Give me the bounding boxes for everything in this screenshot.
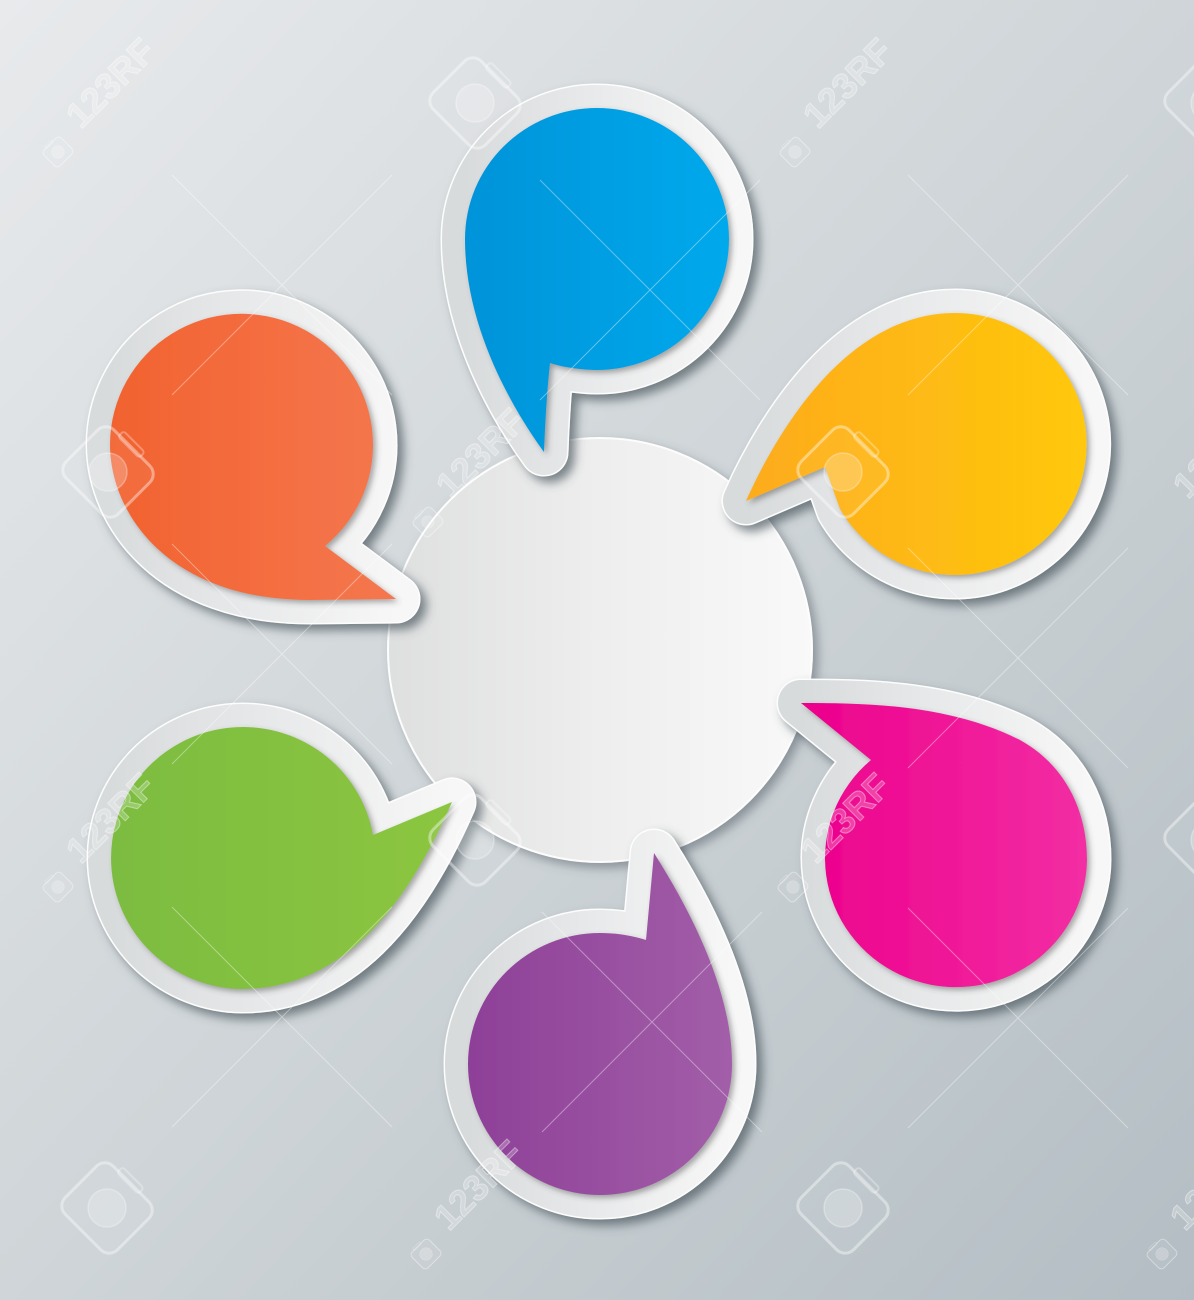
center circle bbox=[388, 438, 812, 862]
bubble: blue bbox=[465, 108, 729, 452]
bubble: orange bbox=[110, 314, 396, 600]
watermarks: 123RF bbox=[58, 30, 163, 136]
watermarks: 123RF bbox=[426, 1132, 531, 1238]
watermarks: 123RF bbox=[428, 400, 533, 506]
watermarks: 123RF bbox=[795, 30, 900, 136]
bubble: pink bbox=[801, 703, 1087, 987]
bubble: yellow bbox=[746, 313, 1087, 575]
watermarks: 123RF bbox=[58, 765, 163, 871]
watermarks: 123RF bbox=[793, 765, 898, 871]
bubble: green bbox=[111, 727, 452, 989]
bubble: purple bbox=[468, 853, 732, 1195]
